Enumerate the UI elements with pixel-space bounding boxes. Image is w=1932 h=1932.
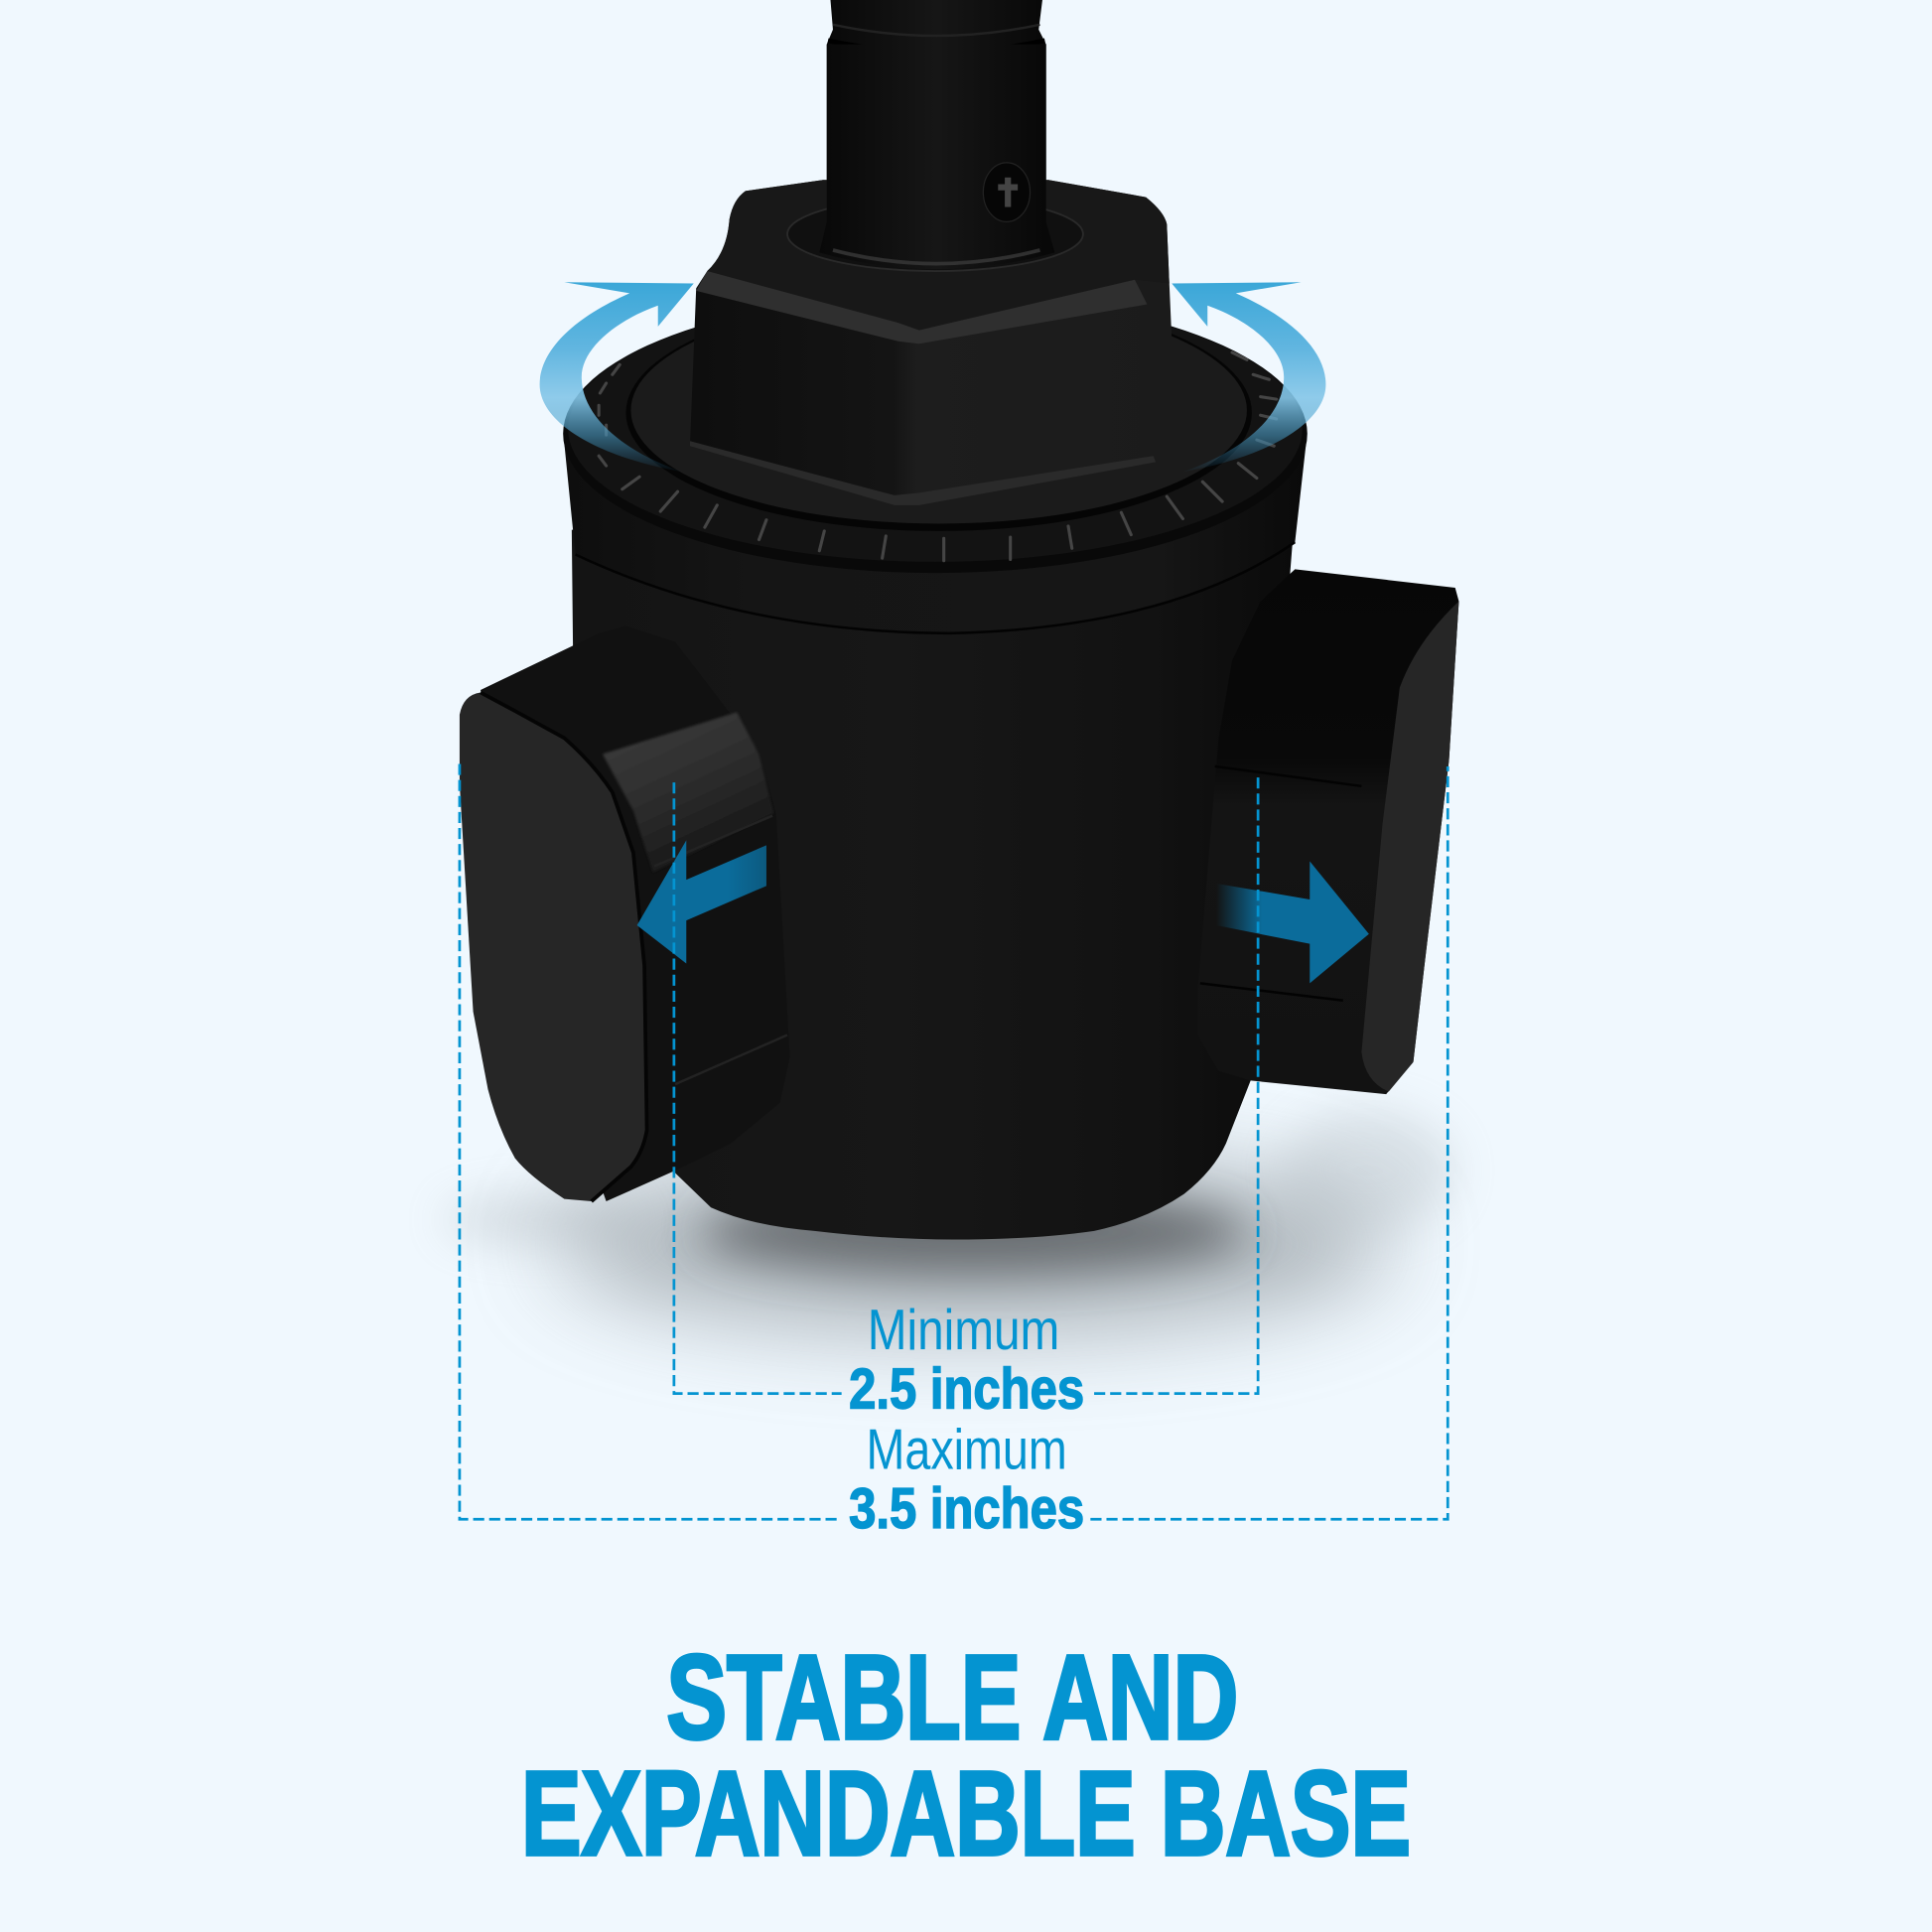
washer and screw [787,198,1083,271]
left paddle [460,625,790,1201]
label: minimum: Minimum [868,1299,1059,1362]
right paddle [1197,569,1458,1094]
cast shadow under base [444,1109,1453,1330]
product photo: cup holder mount [460,0,1458,1240]
label: maximum: Maximum [866,1418,1067,1481]
value: 3.5 inches: 3.5 inches [849,1477,1084,1541]
title: STABLE AND [666,1630,1238,1764]
ring ridges [599,352,1277,561]
title: EXPANDABLE BASE [521,1746,1411,1880]
value: 2.5 inches: 2.5 inches [849,1358,1084,1422]
knob top face [707,180,1170,331]
title [521,1630,1411,1880]
grip ring [563,295,1308,573]
knob highlight bevel [696,271,1147,344]
dimension bracket: minimum [674,776,1258,1394]
body cap collar [564,444,1307,633]
knob nut [690,45,1173,505]
gooseneck and tube [819,0,1054,266]
rotation arrow: right [1172,282,1325,472]
rotation arrow: left [540,282,694,472]
expansion arrow: right [1216,862,1369,983]
dimension bracket: maximum [460,763,1448,1519]
right paddle face pad [1361,602,1458,1092]
housing highlight [603,712,773,873]
expansion arrow: left [637,840,766,964]
main body cylinder [572,530,1293,1240]
left paddle face pad [460,692,647,1201]
